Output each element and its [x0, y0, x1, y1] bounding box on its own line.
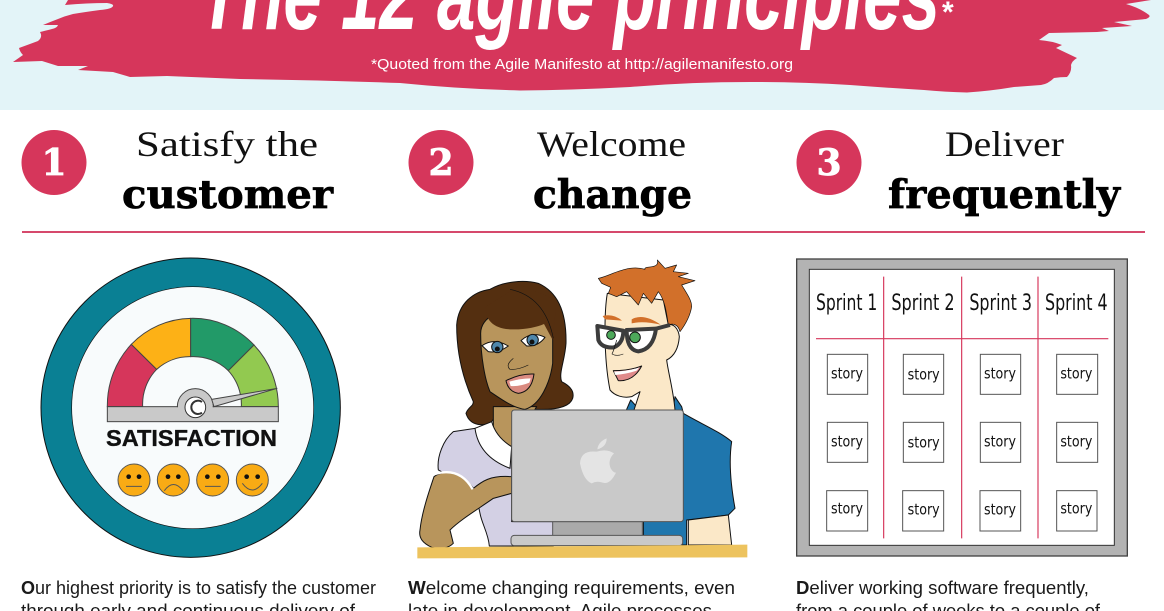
- badge: number 1: 1: [41, 142, 67, 184]
- text block: principle 1: [21, 578, 376, 611]
- text block: principle 2: Welcome changing requirements, even: [408, 578, 735, 598]
- man: [597, 260, 735, 545]
- sprint column headings: [816, 291, 1108, 316]
- badge: number 3: [796, 130, 862, 195]
- heading: welcome change: change: [533, 172, 692, 218]
- illustration: two colleagues at a laptop: [417, 260, 747, 558]
- sprint column headings: Sprint 3: [969, 291, 1032, 316]
- sprint board illustration: [797, 259, 1127, 556]
- text block: principle 1: Our highest priority is to satisfy the customer: [21, 578, 376, 598]
- sprint column headings: Sprint 1: [816, 291, 877, 316]
- sprint board illustration: story: [984, 500, 1016, 518]
- badge: number 1: [22, 130, 86, 195]
- sprint board illustration: story: [908, 500, 940, 518]
- satisfaction label: SATISFACTION: [106, 425, 277, 451]
- sprint board illustration: story: [1060, 432, 1092, 450]
- text block: principle 2: [408, 578, 735, 611]
- heading: satisfy the customer: customer: [122, 172, 333, 218]
- teal ring: [41, 258, 340, 557]
- apple logo: [580, 438, 616, 483]
- sprint board illustration: story: [831, 364, 863, 382]
- sprint board illustration: story: [984, 364, 1016, 382]
- heading: deliver frequently: Deliver: [945, 124, 1064, 164]
- sprint column headings: Sprint 4: [1045, 291, 1108, 316]
- story cards: [827, 354, 1098, 531]
- woman: [420, 281, 573, 549]
- brush stroke banner: [13, 0, 1151, 92]
- badge: number 2: [408, 130, 474, 195]
- heading: satisfy the customer: [122, 124, 333, 218]
- sprint board illustration: story: [908, 433, 940, 451]
- sprint board illustration: story: [908, 365, 940, 383]
- gauge dial: [107, 318, 278, 422]
- sprint board illustration: story: [1060, 500, 1092, 518]
- text block: principle 3: [796, 578, 1101, 611]
- emoji rating faces: [118, 464, 268, 496]
- badge: number 2: 2: [428, 142, 454, 184]
- heading: satisfy the customer: Satisfy the: [136, 124, 318, 164]
- sprint column headings: Sprint 2: [891, 291, 955, 316]
- heading: welcome change: Welcome: [537, 124, 686, 164]
- sprint board illustration: story: [831, 500, 863, 518]
- table: [417, 545, 747, 558]
- sprint board illustration: story: [1060, 364, 1092, 382]
- laptop: [511, 410, 683, 546]
- subtitle note: *Quoted from the Agile Manifesto at http://agilemanifesto.org: [371, 56, 793, 73]
- heading: welcome change: [533, 124, 692, 218]
- heading: deliver frequently: [888, 124, 1121, 218]
- sprint board illustration: story: [831, 432, 863, 450]
- badge: number 3: 3: [816, 142, 842, 184]
- satisfaction gauge illustration: [41, 258, 340, 557]
- text block: principle 3: Deliver working software frequently,: [796, 578, 1089, 598]
- heading: deliver frequently: frequently: [888, 172, 1121, 218]
- header band: [0, 0, 1164, 110]
- sprint board illustration: story: [984, 432, 1016, 450]
